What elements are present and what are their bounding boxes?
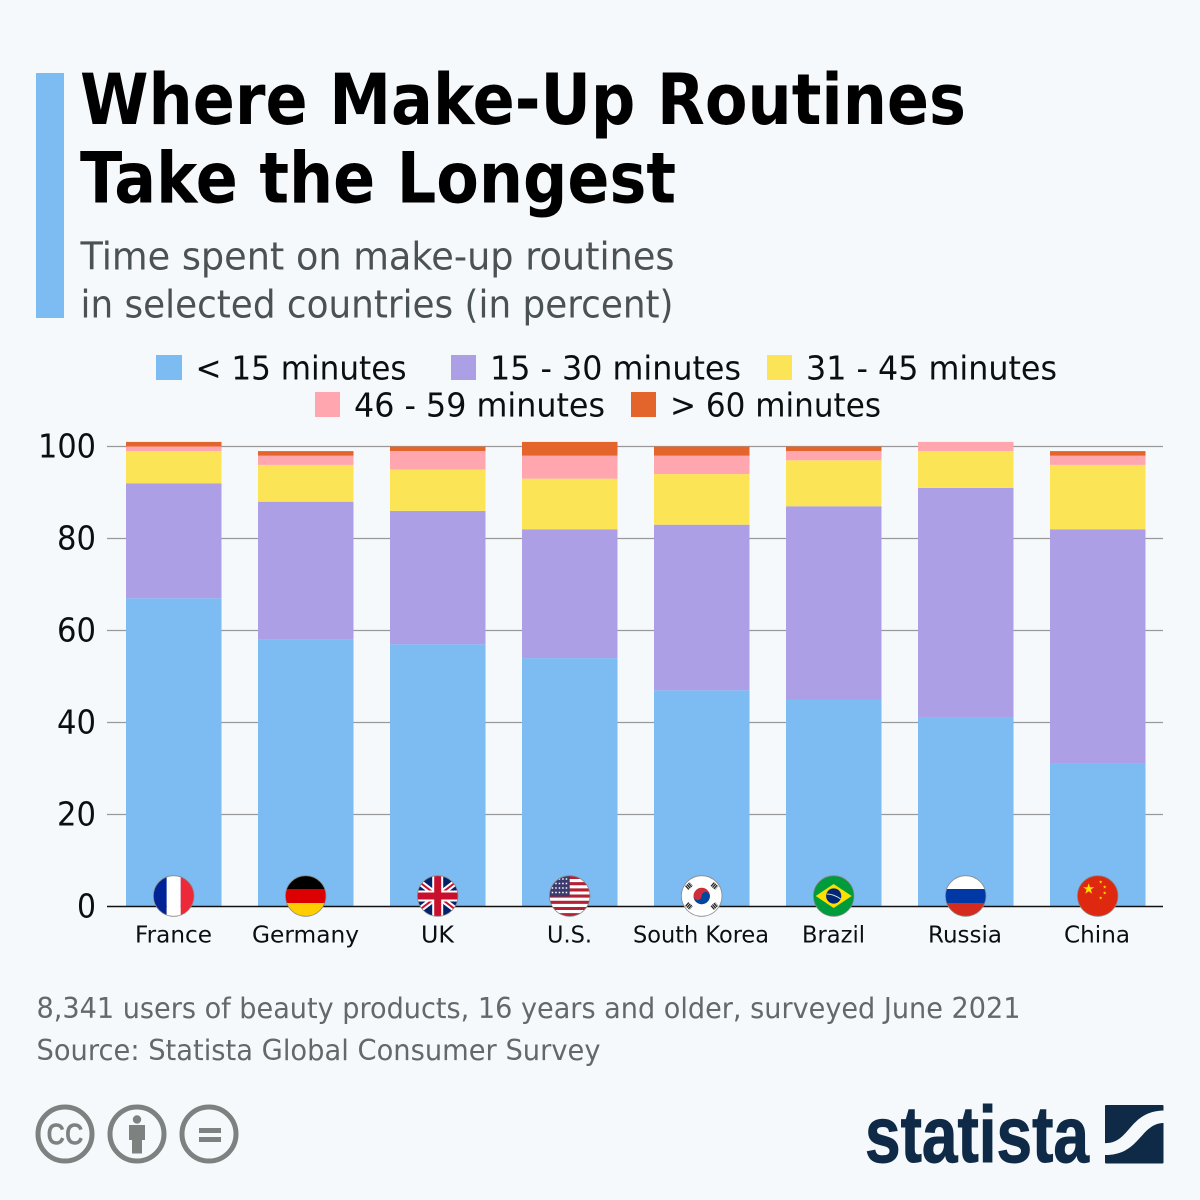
footnote and source xyxy=(36,992,1020,1067)
country labels: China xyxy=(1064,920,1130,948)
legend item: 31-45 minutes: 31 - 45 minutes xyxy=(806,348,1057,388)
accent bar xyxy=(36,73,64,318)
country labels: Russia xyxy=(928,920,1002,948)
title xyxy=(80,59,966,220)
icon: creative commons licence: CC xyxy=(46,1116,84,1152)
icon: South Korea flag xyxy=(681,875,723,917)
x axis baseline xyxy=(107,906,1163,908)
country labels: Brazil xyxy=(802,920,865,948)
icon: Brazil flag xyxy=(813,875,855,917)
title: Take the Longest xyxy=(80,138,676,220)
bar: U.S. xyxy=(522,442,618,906)
bar: France xyxy=(126,442,222,906)
bar: Germany xyxy=(258,451,354,906)
y axis with grid lines: 100 xyxy=(38,426,96,466)
icon: France flag xyxy=(153,875,195,917)
icon: attribution person xyxy=(110,1107,164,1161)
legend item: over 60 minutes: > 60 minutes xyxy=(670,386,881,424)
legend xyxy=(156,348,1057,424)
statista logo: statista xyxy=(865,1090,1089,1179)
y axis with grid lines: 60 xyxy=(57,610,96,650)
y axis with grid lines: 20 xyxy=(57,794,96,834)
bar: China xyxy=(1050,451,1146,906)
bar: Brazil xyxy=(786,446,882,906)
country labels xyxy=(135,920,1130,948)
icon: China flag xyxy=(1077,875,1119,917)
y axis with grid lines: 0 xyxy=(77,886,96,926)
bar: Russia xyxy=(918,442,1014,906)
bar: UK xyxy=(390,446,486,906)
country labels: U.S. xyxy=(547,920,592,948)
icon: U.S. flag xyxy=(549,875,591,917)
subtitle xyxy=(80,234,674,326)
footnote and source: Source: Statista Global Consumer Survey xyxy=(36,1034,601,1067)
country labels: UK xyxy=(421,920,455,948)
icon: creative commons licence xyxy=(38,1107,92,1161)
bar: South Korea xyxy=(654,446,750,906)
legend item: 46-59 minutes: 46 - 59 minutes xyxy=(354,386,605,424)
country labels: Germany xyxy=(252,920,359,948)
legend item: under 15 minutes: < 15 minutes xyxy=(196,348,406,388)
y axis with grid lines: 40 xyxy=(57,702,96,742)
icon: UK flag xyxy=(417,875,459,917)
legend item: 15-30 minutes: 15 - 30 minutes xyxy=(490,348,741,388)
icon: Russia flag xyxy=(945,875,987,917)
subtitle: in selected countries (in percent) xyxy=(80,282,674,326)
subtitle: Time spent on make-up routines xyxy=(80,234,674,278)
footnote and source: 8,341 users of beauty products, 16 years and older, surveyed June 2021 xyxy=(36,992,1020,1025)
icon: no derivatives equals xyxy=(182,1107,236,1161)
country labels: France xyxy=(135,920,212,948)
icon: Germany flag xyxy=(285,875,327,917)
y axis with grid lines: 80 xyxy=(57,518,96,558)
stacked bar chart xyxy=(38,426,1163,948)
country labels: South Korea xyxy=(633,920,769,948)
y axis with grid lines xyxy=(38,426,1163,926)
title: Where Make-Up Routines xyxy=(80,59,966,141)
